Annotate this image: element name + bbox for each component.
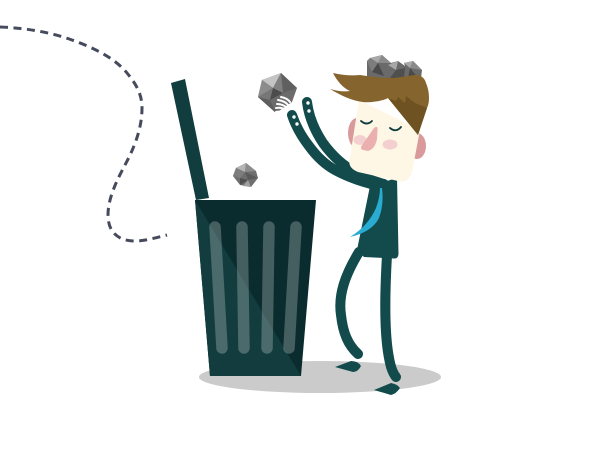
eyes	[361, 121, 401, 130]
left ear	[348, 118, 366, 148]
trash can lid	[171, 79, 209, 200]
hair	[330, 73, 429, 135]
arms	[292, 102, 384, 187]
right ear	[408, 133, 426, 159]
torso	[357, 178, 398, 259]
ground shadow	[199, 361, 441, 393]
can ribs	[215, 227, 296, 348]
falling rock	[233, 163, 258, 187]
trash can	[195, 200, 316, 376]
nose	[361, 127, 378, 151]
shoe left	[335, 361, 361, 372]
tie	[350, 188, 383, 237]
shoe right	[374, 383, 400, 395]
legs	[340, 252, 396, 377]
cuff dots	[292, 101, 311, 126]
rocks on head	[367, 55, 422, 78]
left cheek	[354, 135, 366, 145]
rock in hand	[258, 73, 297, 113]
face	[349, 100, 420, 182]
right cheek	[382, 140, 398, 150]
dashed flight path	[0, 27, 167, 241]
fingers	[276, 97, 290, 113]
